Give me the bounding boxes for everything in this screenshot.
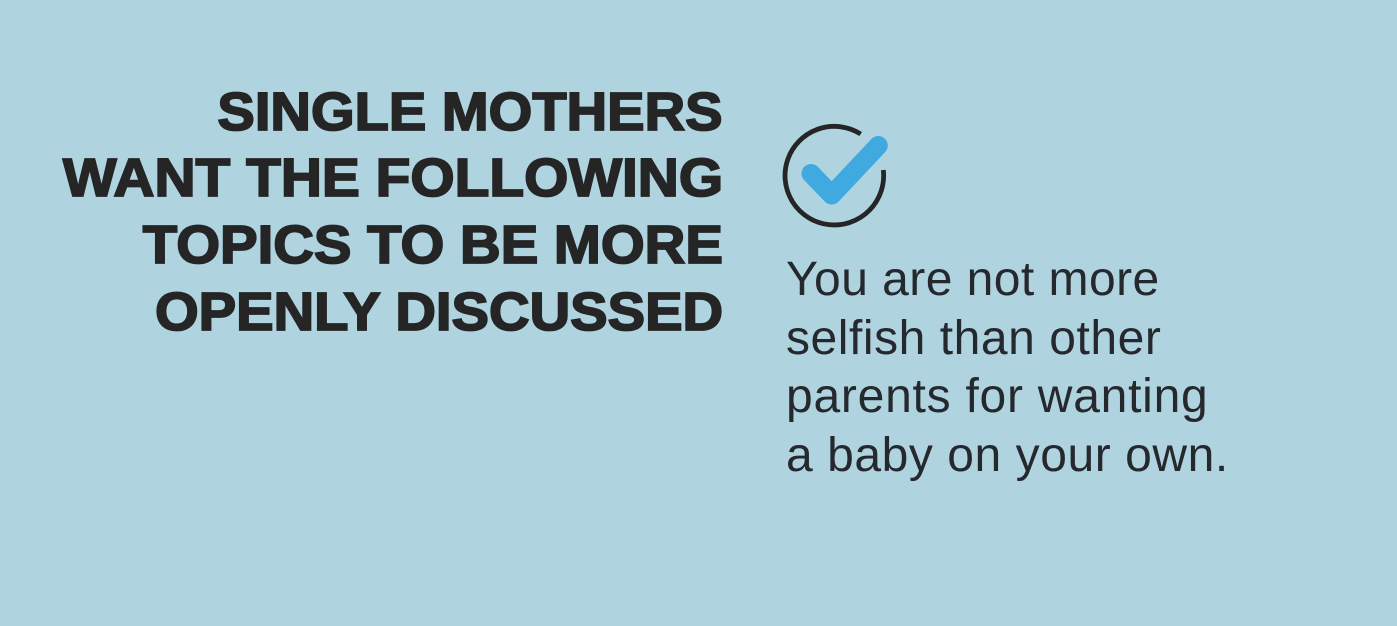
body text: You are not more — [786, 253, 1160, 306]
heading: OPENLY DISCUSSED — [155, 282, 723, 342]
body text: selfish than other — [786, 312, 1161, 365]
icon: check mark in circle — [782, 124, 888, 228]
body text: parents for wanting — [786, 370, 1208, 423]
heading: WANT THE FOLLOWING — [63, 149, 723, 208]
heading — [62, 83, 723, 342]
body text — [786, 253, 1229, 482]
heading: SINGLE MOTHERS — [218, 83, 723, 142]
body text: a baby on your own. — [786, 429, 1229, 482]
heading: TOPICS TO BE MORE — [143, 216, 723, 275]
